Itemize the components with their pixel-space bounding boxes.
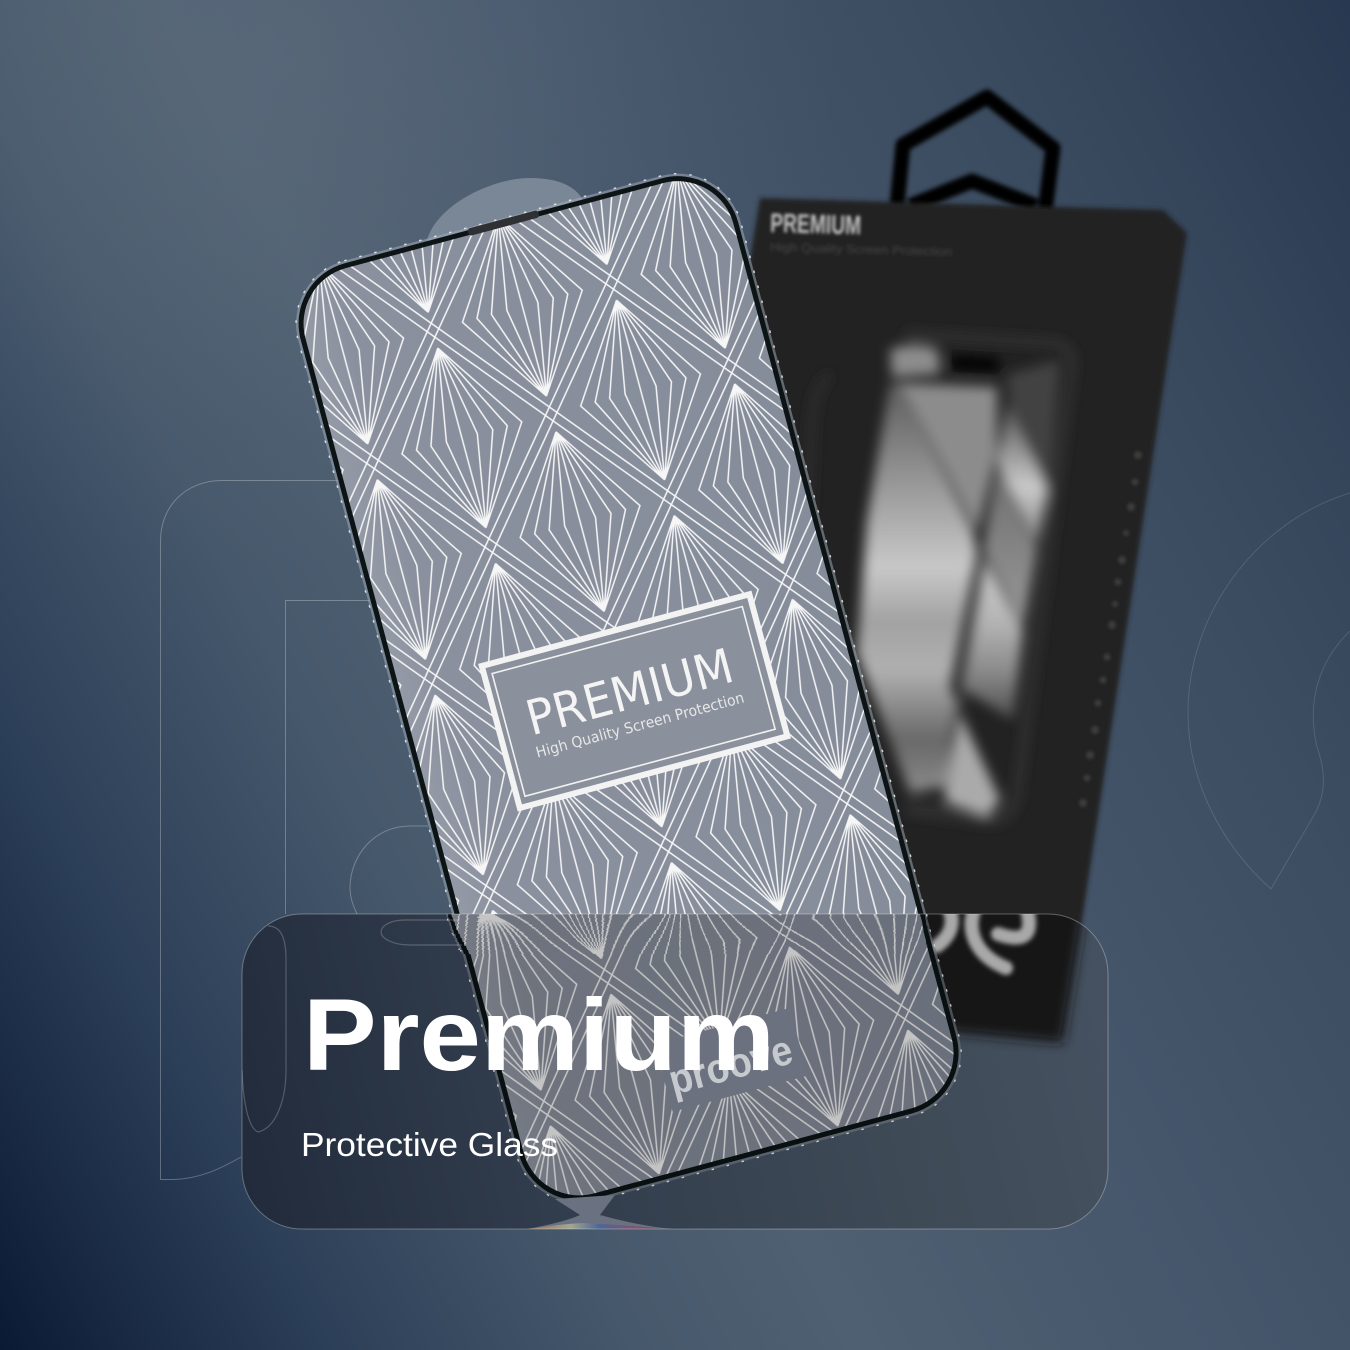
- main canvas: [160, 86, 1350, 1230]
- box title text: [770, 208, 952, 259]
- product box (blurred): [700, 97, 1187, 1045]
- glass caption panel: [242, 914, 1108, 1230]
- premium label: High Quality Screen Protection: [534, 689, 746, 762]
- black frame: [288, 165, 970, 1211]
- box hanger: [897, 97, 1053, 212]
- box title text: PREMIUM: [770, 208, 862, 240]
- box body: [700, 198, 1187, 1045]
- background outline: left device shape: [160, 480, 428, 1180]
- soft shape behind phone top: [425, 178, 583, 260]
- refracted box letters: [937, 905, 1029, 968]
- refracted phone wavy top edge: [446, 914, 937, 954]
- proove logo on glass: proove: [664, 1026, 797, 1104]
- box side dots: [1079, 451, 1142, 807]
- premium label: [482, 594, 787, 808]
- refracted lens outlines: [242, 920, 462, 1132]
- premium label: PREMIUM: [520, 638, 739, 747]
- subtitle: Protective Glass: [301, 1126, 558, 1163]
- box title text: High Quality Screen Protection: [770, 240, 952, 259]
- title: Premium: [303, 978, 775, 1092]
- refracted box bottom: [924, 914, 1089, 1050]
- screen fill: [288, 165, 970, 1211]
- glass rim: [281, 159, 976, 1217]
- background outline: right drop shape: [1188, 493, 1350, 889]
- panel border: [242, 914, 1108, 1229]
- panel refracted contents: [242, 914, 1108, 1229]
- refracted phone body: [462, 954, 962, 1199]
- phone with protective glass: [281, 159, 976, 1217]
- refraction below phone corner: [527, 1195, 672, 1229]
- speaker mesh: [467, 210, 540, 236]
- decorative line pattern: [288, 165, 970, 1211]
- box window phone image: [800, 334, 1072, 822]
